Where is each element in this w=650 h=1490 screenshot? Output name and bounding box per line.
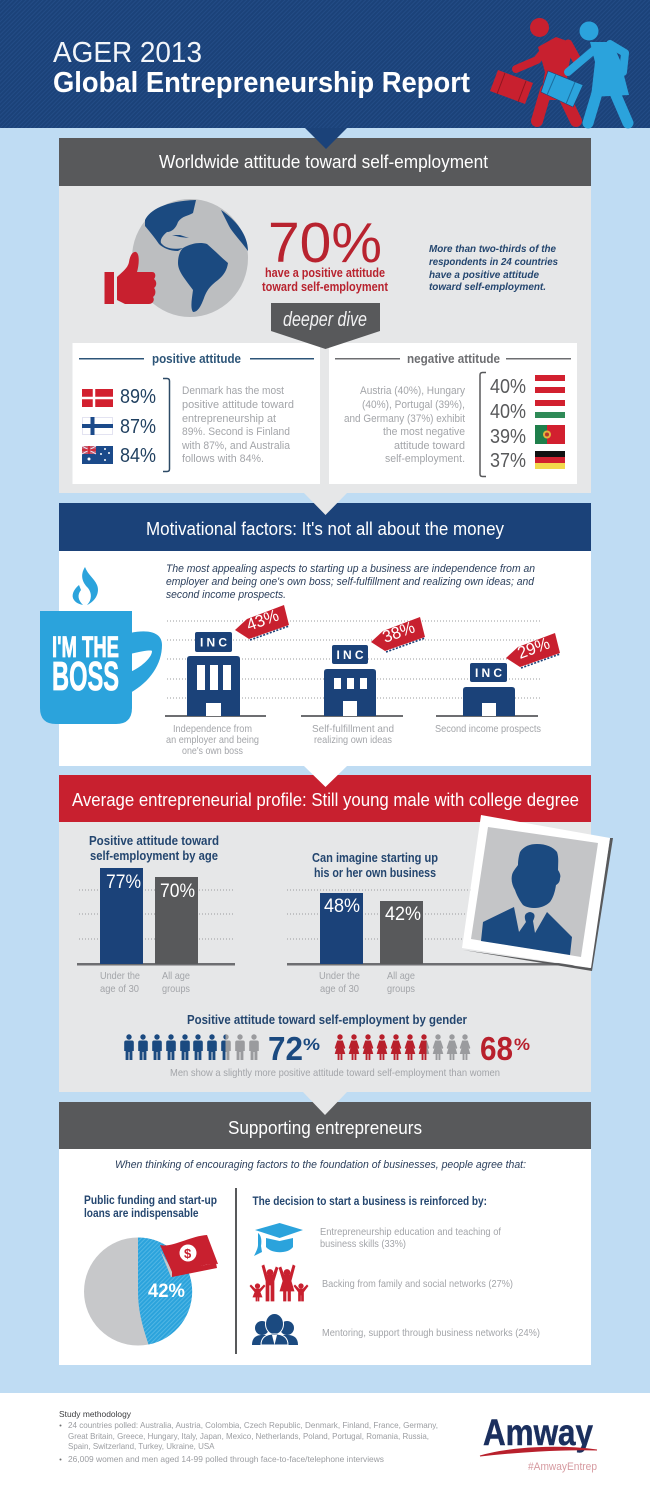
icon: money: $ bbox=[184, 1246, 192, 1261]
flag: Germany bbox=[535, 451, 565, 469]
panel: worldwide attitude bbox=[59, 138, 591, 493]
arrow: section 1 pointer bbox=[304, 493, 347, 515]
stat: Austria: 40% bbox=[490, 376, 526, 398]
axis labels: All age bbox=[162, 970, 190, 982]
tag: 38 percent: 38% bbox=[380, 618, 417, 647]
heading band: entrepreneurial profile bbox=[59, 775, 591, 822]
icon: mentoring group bbox=[252, 1314, 298, 1345]
icon: building 38 percent: INC bbox=[336, 648, 364, 662]
bar: 42 percent: 42% bbox=[385, 904, 421, 925]
icon: steam bbox=[73, 567, 98, 605]
stat: men 72 percent: 72 bbox=[268, 1030, 303, 1067]
stat: Germany: 37% bbox=[490, 450, 526, 472]
tag: 38 percent bbox=[371, 617, 425, 652]
axis labels: groups bbox=[387, 983, 415, 995]
heading: positive attitude: positive attitude bbox=[152, 351, 241, 366]
icon: thumbs up bbox=[104, 252, 156, 304]
text: two-thirds note: respondents in 24 countries bbox=[429, 256, 558, 268]
pie chart: 42 percent: 42% bbox=[148, 1281, 185, 1302]
icon: red businessman with suitcase bbox=[490, 18, 578, 121]
heading band: motivational factors bbox=[59, 503, 591, 551]
caption: gender comparison: Men show a slightly more positive attitude toward self-employment than women bbox=[170, 1067, 500, 1079]
bar: 77 percent: 77% bbox=[106, 872, 141, 893]
text: motivational intro: employer and being one's own boss; self-fulfillment and realizing own ideas; and bbox=[166, 576, 535, 588]
icon: graduation cap bbox=[254, 1223, 303, 1256]
text: negative description bbox=[344, 385, 465, 465]
label: independence: one's own boss bbox=[182, 745, 243, 757]
stat: Finland: 87% bbox=[120, 416, 156, 438]
label: self-fulfillment: Self-fulfillment and bbox=[312, 723, 394, 735]
text: education bbox=[320, 1226, 501, 1250]
text: negative description: Austria (40%), Hungary bbox=[360, 385, 465, 397]
header title: Global Entrepreneurship Report bbox=[53, 67, 470, 99]
heading band: worldwide attitude: Worldwide attitude toward self-employment bbox=[159, 152, 488, 172]
icon: building 43 percent bbox=[165, 632, 266, 717]
bar: 70 percent bbox=[155, 877, 198, 964]
bar: 42 percent bbox=[380, 901, 423, 964]
text: positive description: follows with 84%. bbox=[182, 453, 264, 465]
divider bbox=[235, 1188, 237, 1354]
axis labels: groups bbox=[162, 983, 190, 995]
flag: Finland bbox=[82, 417, 113, 435]
heading: public funding: loans are indispensable bbox=[84, 1206, 199, 1220]
icon: building 43 percent: INC bbox=[200, 636, 227, 650]
text: study methodology: Study methodology bbox=[59, 1409, 132, 1419]
label: independence bbox=[166, 723, 259, 757]
bar: 48 percent: 48% bbox=[324, 896, 360, 917]
text: family backing: Backing from family and social networks (27%) bbox=[322, 1278, 513, 1290]
heading: imagine starting: Can imagine starting up bbox=[312, 851, 438, 865]
flag: Australia bbox=[82, 446, 113, 464]
icon: blue businesswoman with suitcase bbox=[541, 22, 629, 123]
text: mentoring: Mentoring, support through business networks (24%) bbox=[322, 1327, 540, 1339]
arrow: section 3 pointer bbox=[303, 1092, 347, 1115]
text: negative description: (40%), Portugal (39%), bbox=[362, 399, 465, 411]
axis labels: Under the bbox=[100, 970, 140, 982]
heading: attitude by age: Positive attitude toward bbox=[89, 834, 219, 848]
flag: Denmark bbox=[82, 389, 113, 407]
text: education: Entrepreneurship education and teaching of bbox=[320, 1226, 501, 1238]
icon: I'm the boss mug: I'M THE bbox=[52, 631, 119, 664]
heading: negative attitude: negative attitude bbox=[407, 351, 500, 366]
icon: I'm the boss mug: BOSS bbox=[52, 653, 119, 699]
heading: attitude by age bbox=[89, 834, 219, 863]
text: study methodology: 24 countries polled: Australia, Austria, Colombia, Czech Republic, Denmark, Finland, France, Germany, bbox=[68, 1420, 438, 1430]
panel: entrepreneurial profile bbox=[59, 775, 591, 1092]
heading: attitude by gender: Positive attitude toward self-employment by gender bbox=[187, 1013, 467, 1027]
bar chart: imagine starting bbox=[287, 893, 591, 995]
arrow: section 2 pointer bbox=[304, 766, 347, 787]
tag: 43 percent: 43% bbox=[244, 606, 281, 635]
text: motivational intro: The most appealing aspects to starting up a business are independence from an bbox=[166, 563, 535, 575]
icon: globe bbox=[132, 199, 248, 317]
stat: Hungary: 40% bbox=[490, 401, 526, 423]
icon: I'm the boss mug bbox=[40, 611, 162, 724]
callout: deeper dive bbox=[271, 303, 380, 349]
heading band: motivational factors: Motivational factors: It's not all about the money bbox=[146, 519, 504, 539]
text: positive attitude caption: toward self-employment bbox=[262, 280, 389, 294]
bar: 70 percent: 70% bbox=[160, 881, 195, 902]
axis labels bbox=[100, 970, 190, 995]
panel: footer bbox=[0, 1393, 650, 1490]
label: independence: Independence from bbox=[173, 723, 252, 735]
stat: Australia: 84% bbox=[120, 445, 156, 467]
heading: attitude by age: self-employment by age bbox=[90, 849, 218, 863]
heading: imagine starting: his or her own business bbox=[314, 866, 436, 880]
axis labels: Under the bbox=[319, 970, 360, 982]
bracket: positive bbox=[163, 378, 170, 472]
pie chart: 42 percent bbox=[84, 1237, 192, 1346]
stat: men 72 percent: % bbox=[303, 1035, 320, 1054]
text: two-thirds note: More than two-thirds of the bbox=[429, 243, 556, 255]
stat: women 68 percent: % bbox=[514, 1035, 530, 1054]
panel: negative attitude bbox=[329, 343, 577, 484]
statistic: 70 percent: 70% bbox=[268, 211, 382, 275]
heading: public funding bbox=[84, 1193, 217, 1220]
text: study methodology: Great Britain, Greece, Hungary, Italy, Japan, Mexico, Netherlands, Poland, Portugal, Romania, Russia, bbox=[68, 1431, 429, 1441]
text: negative description: self-employment. bbox=[385, 453, 465, 465]
label: self-fulfillment bbox=[312, 723, 394, 746]
text: two-thirds note: toward self-employment. bbox=[429, 281, 546, 293]
flag: Portugal bbox=[535, 425, 565, 444]
text: positive description: with 87%, and Australia bbox=[181, 440, 291, 452]
panel: supporting entrepreneurs bbox=[59, 1102, 591, 1365]
tag: 29 percent bbox=[506, 633, 560, 668]
bar: 48 percent bbox=[320, 893, 363, 964]
bar: 77 percent bbox=[100, 868, 143, 964]
axis labels: All age bbox=[387, 970, 415, 982]
label: independence: an employer and being bbox=[166, 734, 259, 746]
text: positive description: Denmark has the most bbox=[182, 385, 284, 397]
hashtag: #AmwayEntrep bbox=[528, 1461, 597, 1473]
icon: building 38 percent bbox=[301, 645, 403, 717]
arrow: header pointer bbox=[305, 128, 347, 149]
panel: positive attitude bbox=[72, 343, 320, 484]
heading band: worldwide attitude bbox=[59, 138, 591, 186]
tag: 43 percent bbox=[235, 605, 289, 640]
heading band: supporting entrepreneurs bbox=[59, 1102, 591, 1149]
icon: money bbox=[160, 1235, 218, 1277]
text: study methodology: Spain, Switzerland, Turkey, Ukraine, USA bbox=[68, 1441, 215, 1451]
axis labels: age of 30 bbox=[320, 983, 359, 995]
heading: imagine starting bbox=[312, 851, 438, 880]
text: positive description: positive attitude toward bbox=[182, 399, 294, 411]
text: motivational intro: second income prospects. bbox=[166, 589, 286, 601]
text: positive description: 89%. Second is Finland bbox=[182, 426, 290, 438]
logo: Amway: Amway bbox=[483, 1412, 593, 1453]
text: two-thirds note: have a positive attitude bbox=[429, 269, 539, 281]
axis labels: age of 30 bbox=[100, 983, 139, 995]
bracket: negative bbox=[480, 372, 486, 476]
photo: businessman portrait bbox=[462, 815, 613, 971]
pictogram: women 68 percent bbox=[335, 1034, 470, 1060]
text: two-thirds note bbox=[429, 243, 558, 293]
heading band: entrepreneurial profile: Average entrepreneurial profile: Still young male with college degree bbox=[72, 790, 579, 810]
icon: family bbox=[250, 1265, 308, 1301]
icon: building 29 percent bbox=[436, 663, 538, 717]
text: negative description: attitude toward bbox=[394, 440, 465, 452]
tag: 29 percent: 29% bbox=[515, 634, 552, 663]
icon: building 29 percent: INC bbox=[475, 666, 502, 680]
label: second income: Second income prospects bbox=[435, 723, 541, 735]
text: education: business skills (33%) bbox=[320, 1238, 406, 1250]
stat: women 68 percent: 68 bbox=[480, 1030, 513, 1067]
header title: AGER 2013 bbox=[53, 37, 202, 69]
text: study methodology bbox=[59, 1409, 438, 1464]
axis labels bbox=[319, 970, 415, 995]
text: positive description: entrepreneurship at bbox=[182, 413, 276, 425]
stat: Portugal: 39% bbox=[490, 426, 526, 448]
callout: deeper dive: deeper dive bbox=[283, 309, 367, 331]
label: self-fulfillment: realizing own ideas bbox=[314, 734, 392, 746]
text: positive description bbox=[181, 385, 294, 465]
header banner bbox=[0, 0, 650, 128]
dotted gridlines bbox=[79, 890, 475, 939]
text: positive attitude caption: have a positive attitude bbox=[265, 266, 385, 280]
heading: decision reinforced: The decision to start a business is reinforced by: bbox=[252, 1194, 487, 1208]
text: encouraging factors intro: When thinking of encouraging factors to the foundation of businesses, people agree that: bbox=[115, 1159, 526, 1171]
text: negative description: and Germany (37%) exhibit bbox=[344, 413, 465, 425]
flag: Hungary bbox=[535, 400, 565, 418]
heading: public funding: Public funding and start-up bbox=[84, 1193, 217, 1207]
bar chart: attitude by age bbox=[77, 868, 235, 995]
dotted gridlines bbox=[167, 621, 541, 698]
header title bbox=[53, 37, 470, 99]
flag: Austria bbox=[535, 375, 565, 393]
panel: motivational factors bbox=[59, 503, 591, 766]
text: motivational intro bbox=[166, 563, 535, 601]
stat: Denmark: 89% bbox=[120, 386, 156, 408]
text: negative description: the most negative bbox=[383, 426, 465, 438]
text: positive attitude caption bbox=[262, 266, 389, 294]
pictogram: men 72 percent bbox=[124, 1034, 259, 1060]
heading band: supporting entrepreneurs: Supporting entrepreneurs bbox=[228, 1118, 422, 1138]
text: study methodology: 26,009 women and men aged 14-99 polled through face-to-face/telephone interviews bbox=[68, 1454, 384, 1464]
